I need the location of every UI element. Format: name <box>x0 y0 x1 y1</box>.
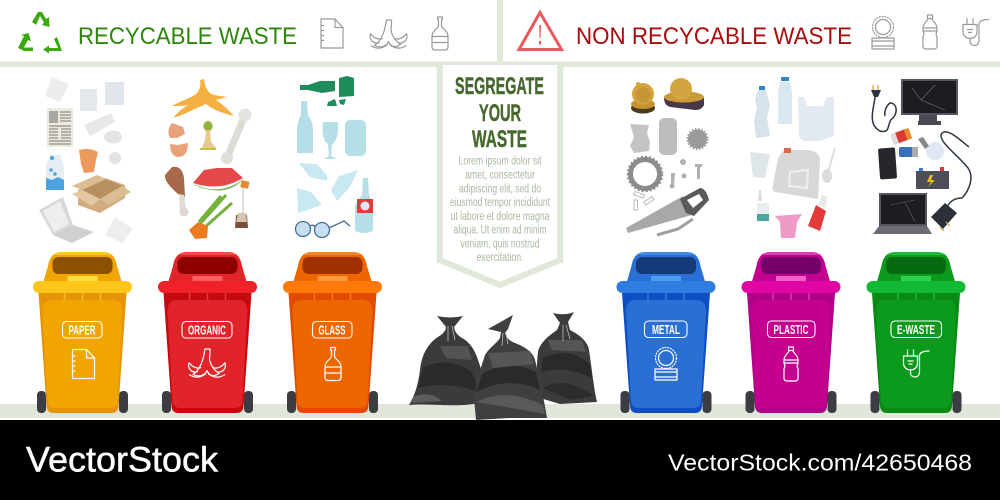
bin: organic <box>158 252 257 413</box>
tube <box>808 195 827 231</box>
footer logo: VectorStock <box>26 440 219 480</box>
garbage bags <box>409 312 597 420</box>
glass shards <box>297 163 358 213</box>
milk carton <box>46 155 64 190</box>
tea bag <box>235 180 250 228</box>
label: glass <box>312 322 352 338</box>
label: metal <box>644 321 687 338</box>
header: non recyclable waste <box>519 12 989 50</box>
crushed cup <box>79 149 98 173</box>
icon: bottle <box>325 348 341 380</box>
text block: lorem ipsum: aliqua. Ut enim ad minim <box>454 224 546 236</box>
yogurt cup <box>775 214 802 238</box>
glasses <box>296 221 350 238</box>
text block: lorem ipsum: eiusmod tempor incididunt <box>450 197 551 209</box>
text block: lorem ipsum: veniam, quis nostrud <box>460 238 540 250</box>
icon: banana peel <box>189 349 225 377</box>
bottle <box>778 77 792 124</box>
label: organic: ORGANIC <box>188 322 226 338</box>
bin: e-waste <box>866 252 966 413</box>
organic waste items <box>165 79 252 239</box>
heading: non recyclable waste: NON RECYCABLE WASTE <box>576 23 852 50</box>
text block: lorem ipsum: adipiscing elit, sed do <box>459 184 541 196</box>
heading: segregate your waste <box>455 73 544 153</box>
label: paper: PAPER <box>68 322 96 338</box>
bag centre <box>474 315 547 420</box>
paper clips <box>634 191 654 210</box>
sardine can <box>631 82 655 114</box>
clear bottle <box>297 101 313 153</box>
label: plastic: PLASTIC <box>774 322 809 337</box>
cracked monitor <box>901 79 958 125</box>
aluminium can <box>659 118 677 155</box>
bolts and nuts <box>670 159 702 188</box>
eggshells <box>168 123 188 157</box>
label: e-waste <box>891 321 942 338</box>
blue battery <box>899 147 918 157</box>
power cord <box>871 85 896 131</box>
text block: lorem ipsum: exercitation. <box>476 252 524 264</box>
carrot <box>189 195 232 239</box>
bag left <box>409 316 483 405</box>
glass waste items <box>296 76 373 238</box>
paper waste items <box>39 77 133 243</box>
text block: lorem ipsum: amet, consectetur <box>465 170 535 182</box>
bin: plastic <box>742 252 840 413</box>
apple core <box>200 120 216 150</box>
icon: warning triangle <box>519 12 562 50</box>
icon: paper outline <box>321 19 343 48</box>
watermelon <box>192 168 245 190</box>
heading: recyclable waste: RECYCABLE WASTE <box>78 23 297 50</box>
label: e-waste: E-WASTE <box>897 322 935 337</box>
open can <box>664 78 704 110</box>
light bulb <box>918 137 944 160</box>
gear ring <box>628 157 662 191</box>
plastic bag <box>798 97 834 141</box>
plastic cup <box>750 152 770 178</box>
charger cable <box>931 132 971 231</box>
header dividers <box>0 0 1000 67</box>
crushed bottle <box>754 86 770 138</box>
icon: plastic bottle <box>784 347 798 381</box>
soda bottle <box>355 178 373 233</box>
cracked phone <box>878 147 897 180</box>
heading: segregate your waste: SEGREGATE <box>455 73 544 100</box>
panel: segregate your waste banner <box>440 65 560 285</box>
label: paper <box>62 322 102 338</box>
bin: paper <box>33 252 132 413</box>
spoon <box>822 148 835 183</box>
cardboard box <box>72 175 131 213</box>
cracked laptop <box>873 193 932 234</box>
broken green bottle <box>300 76 354 106</box>
icon: plug outline <box>963 18 989 46</box>
heading: segregate your waste: WASTE <box>472 126 527 153</box>
banana peel <box>172 79 234 118</box>
icon: plug <box>904 350 930 377</box>
nasal spray <box>757 190 769 221</box>
wine glass <box>323 122 338 159</box>
metal waste items <box>626 78 709 235</box>
jar <box>345 120 366 156</box>
newspaper <box>47 108 73 147</box>
plastic waste items <box>750 77 835 238</box>
label: organic <box>182 322 232 338</box>
text block: lorem ipsum: Lorem ipsum dolor sit <box>458 156 542 168</box>
text block: lorem ipsum <box>450 156 551 264</box>
footer bar <box>0 420 1000 500</box>
old laptop <box>39 197 94 243</box>
red battery <box>890 128 912 145</box>
icon: plastic bottle outline <box>923 15 937 49</box>
jerry can <box>772 148 820 199</box>
icon: metal can <box>655 348 677 380</box>
bin: glass <box>283 252 382 413</box>
icon: metal can outline <box>872 16 894 49</box>
icon: paper <box>72 350 94 378</box>
crushed can <box>630 124 650 153</box>
ground strip <box>0 404 1000 418</box>
chicken leg <box>165 167 188 216</box>
icon: bottle outline <box>432 17 448 50</box>
icon: banana peel outline <box>370 20 407 48</box>
label: glass: GLASS <box>318 322 346 338</box>
header: recyclable waste <box>18 12 448 54</box>
car battery <box>916 167 949 189</box>
e-waste items <box>871 79 971 234</box>
label: metal: METAL <box>652 322 680 337</box>
heading: segregate your waste: YOUR <box>479 100 521 127</box>
saw blade <box>688 130 707 148</box>
fork <box>657 219 693 235</box>
footer url: VectorStock.com/42650468 <box>668 450 972 476</box>
bag right <box>537 312 597 404</box>
bone <box>221 108 252 164</box>
text block: lorem ipsum: ut labore et dolore magna <box>450 211 550 223</box>
icon: recycling arrows <box>18 12 62 54</box>
bin: metal <box>616 252 716 413</box>
label: plastic <box>768 321 815 338</box>
hand saw <box>626 188 709 233</box>
